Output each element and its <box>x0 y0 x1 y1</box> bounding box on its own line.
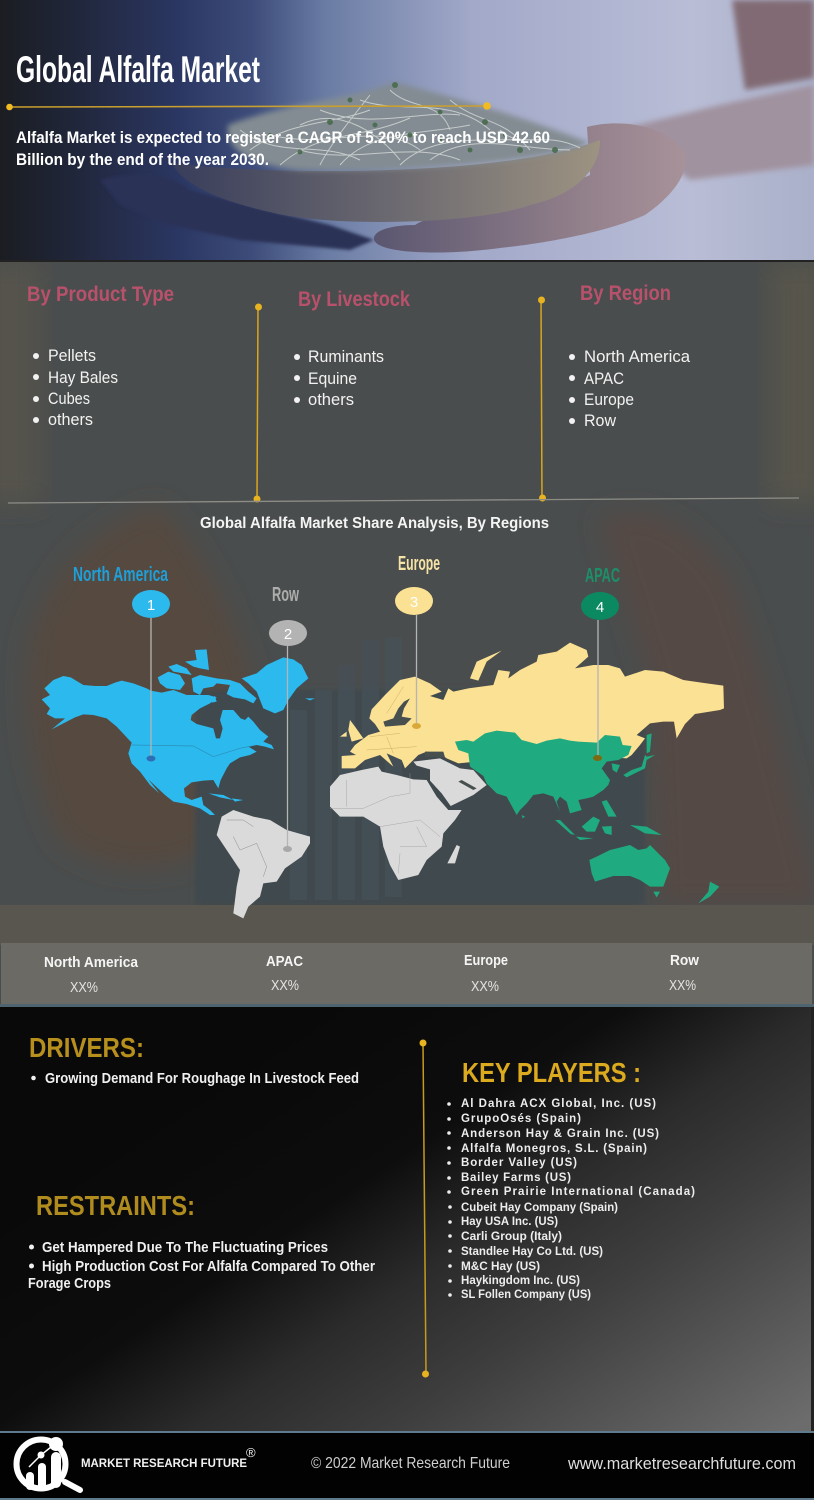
text: brand name: ® <box>246 1445 256 1460</box>
panel: regional share strip: XX% <box>471 978 499 995</box>
map pointer: APAC <box>593 620 602 761</box>
list: regions: North America <box>584 347 691 366</box>
map pointer: Row <box>283 646 292 852</box>
map label: APAC: 4 <box>596 599 604 616</box>
panel: regional share strip: Row <box>670 952 699 969</box>
list: key players: GrupoOsés (Spain) <box>461 1113 581 1125</box>
icon: right hand <box>374 123 686 253</box>
world map <box>42 615 724 918</box>
list: product types <box>33 346 118 429</box>
list: key players: Border Valley (US) <box>461 1157 577 1169</box>
heading: By Region: By Region <box>580 282 671 305</box>
text: market summary: Billion by the end of the year 2030. <box>16 151 269 169</box>
list: key players: SL Follen Company (US) <box>461 1289 591 1301</box>
map: Africa and Middle East <box>330 758 487 880</box>
map label: APAC <box>581 565 620 620</box>
list: key players: Anderson Hay & Grain Inc. (US) <box>461 1128 659 1140</box>
divider: right vertical connector <box>538 296 546 502</box>
list: key players: Carli Group (Italy) <box>461 1231 562 1243</box>
title: Global Alfalfa Market <box>16 49 260 90</box>
text: drivers list: Growing Demand For Roughage In Livestock Feed <box>45 1070 359 1087</box>
list: regions: APAC <box>584 369 624 388</box>
list: key players: Hay USA Inc. (US) <box>461 1216 558 1228</box>
text: copyright: © 2022 Market Research Future <box>311 1455 510 1472</box>
list: livestock: Equine <box>308 369 357 388</box>
map: North America <box>42 649 315 815</box>
icon: bowl <box>172 140 600 222</box>
map label: North America: North America <box>73 564 169 586</box>
divider: vertical connector <box>420 1040 429 1378</box>
list: livestock: Ruminants <box>308 347 384 366</box>
list: product types: Pellets <box>48 346 96 365</box>
heading: drivers: DRIVERS: <box>29 1032 144 1063</box>
list: key players <box>447 1098 695 1301</box>
map label: Europe: Europe <box>398 553 440 575</box>
icon: alfalfa sprouts <box>228 82 590 170</box>
text: brand name: MARKET RESEARCH FUTURE <box>81 1456 247 1470</box>
list: key players: Haykingdom Inc. (US) <box>461 1275 580 1287</box>
heading: market share analysis: Global Alfalfa Market Share Analysis, By Regions <box>200 515 549 532</box>
map pointer: Europe <box>412 615 421 729</box>
map label: Europe: 3 <box>410 594 418 611</box>
list: regions: Europe <box>584 390 634 409</box>
map label: North America <box>73 564 170 618</box>
map: Europe and Russia <box>340 643 724 768</box>
text: restraints list <box>28 1239 375 1292</box>
text: restraints list: Forage Crops <box>28 1275 111 1292</box>
background: hands <box>28 512 250 866</box>
text: market summary <box>16 129 550 169</box>
list: product types: Cubes <box>48 389 90 408</box>
panel: regional share strip: XX% <box>70 979 98 996</box>
panel: regional share strip: North America <box>44 954 139 971</box>
map label: APAC: APAC <box>585 565 620 587</box>
list: key players: Standlee Hay Co Ltd. (US) <box>461 1246 603 1258</box>
icon: left hand <box>100 175 374 250</box>
panel: hero header <box>0 0 814 260</box>
map label: Row: 2 <box>284 626 292 643</box>
heading: By Product Type: By Product Type <box>27 283 174 306</box>
icon: Market Research Future logo <box>16 1437 80 1490</box>
text: market summary: Alfalfa Market is expected to register a CAGR of 5.20% to reach USD 42.60 <box>16 129 550 147</box>
heading: By Livestock: By Livestock <box>298 288 410 311</box>
divider: title rule <box>6 102 491 110</box>
map pointer: North America <box>146 618 156 762</box>
panel: segmentation and map background <box>0 262 814 1005</box>
panel: drivers, restraints and key players <box>0 1007 814 1433</box>
map: Asia Pacific <box>455 731 719 903</box>
heading: key players: KEY PLAYERS : <box>462 1057 641 1088</box>
list: key players: Bailey Farms (US) <box>461 1172 571 1184</box>
list: regions <box>569 347 691 430</box>
text: website: www.marketresearchfuture.com <box>567 1454 796 1473</box>
panel: regional share strip: Europe <box>464 952 508 969</box>
list: livestock: others <box>308 390 354 409</box>
map: South America <box>217 810 310 918</box>
list: key players: Al Dahra ACX Global, Inc. (US) <box>461 1098 656 1110</box>
divider: left vertical connector <box>254 304 262 502</box>
list: product types: Hay Bales <box>48 368 118 387</box>
background: bar chart <box>195 690 645 905</box>
map label: Row <box>269 584 307 646</box>
panel: regional share strip: APAC <box>266 953 303 970</box>
map: Australia <box>589 845 670 887</box>
panel: regional share strip <box>1 943 812 1004</box>
map label: North America: 1 <box>147 597 155 614</box>
text: restraints list: Get Hampered Due To The Fluctuating Prices <box>42 1239 328 1256</box>
panel: regional share strip: XX% <box>669 977 696 994</box>
list: product types: others <box>48 410 93 429</box>
map: Greenland <box>242 657 308 713</box>
panel: footer <box>0 1433 814 1500</box>
map label: Row: Row <box>272 584 299 606</box>
panel: regional share strip: XX% <box>271 977 299 994</box>
list: key players: Cubeit Hay Company (Spain) <box>461 1202 618 1214</box>
heading: restraints: RESTRAINTS: <box>36 1190 195 1221</box>
text: brand name <box>81 1445 256 1470</box>
list: regions: Row <box>584 411 617 430</box>
map label: Europe <box>395 553 440 615</box>
list: key players: Alfalfa Monegros, S.L. (Spain) <box>461 1143 647 1155</box>
list: key players: M&C Hay (US) <box>461 1261 540 1273</box>
list: key players: Green Prairie International (Canada) <box>461 1186 695 1198</box>
text: restraints list: High Production Cost For Alfalfa Compared To Other <box>42 1258 375 1275</box>
list: livestock <box>294 347 384 409</box>
